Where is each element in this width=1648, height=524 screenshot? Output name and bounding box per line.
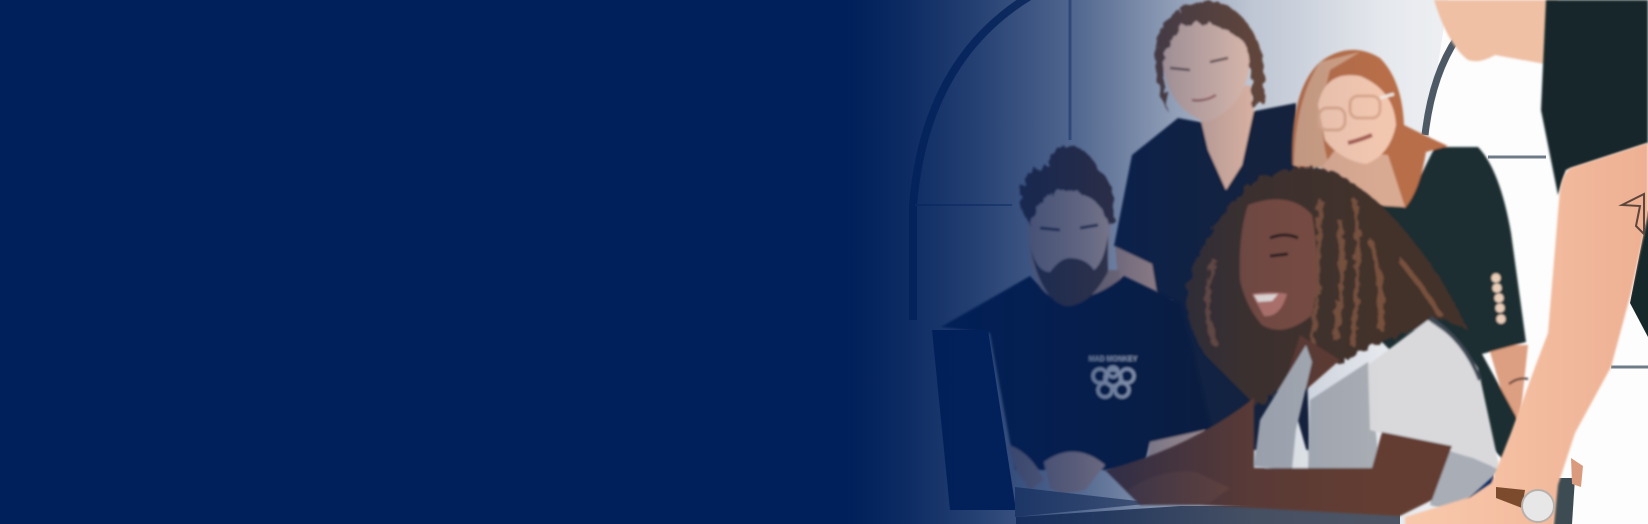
window frame at bottom <box>1553 478 1575 524</box>
small arm tattoo <box>1622 194 1644 234</box>
glasses <box>1319 94 1394 130</box>
face <box>1160 14 1250 122</box>
desk edge <box>1016 506 1400 524</box>
hair highlights <box>1208 200 1440 345</box>
face <box>1026 184 1112 302</box>
neck <box>1320 150 1405 207</box>
tattooed forearm <box>1148 430 1208 462</box>
white undershirt <box>1264 410 1312 470</box>
facial features <box>1170 58 1228 100</box>
shirt far side <box>1630 210 1648 337</box>
grey lower back <box>1430 448 1500 512</box>
navy gradient overlay <box>850 0 1648 524</box>
forearm <box>1488 345 1528 420</box>
strap <box>1430 318 1480 380</box>
man in foreground, right <box>1405 0 1648 524</box>
neck <box>1040 270 1120 300</box>
grey vest <box>1254 345 1380 470</box>
dark green blazer <box>1330 147 1526 460</box>
dark curly hair <box>1186 167 1468 408</box>
black t-shirt <box>1541 0 1648 195</box>
chin and neck <box>1434 0 1558 64</box>
bracelet <box>1509 379 1528 384</box>
blurred hand behind <box>1571 458 1583 487</box>
dark shirt <box>1114 103 1310 450</box>
face <box>1318 75 1396 164</box>
standing man, left <box>1114 2 1310 450</box>
beard <box>1030 235 1108 306</box>
auburn hair <box>1292 50 1448 208</box>
smile <box>1348 135 1372 143</box>
screen back <box>932 330 1016 510</box>
hair <box>1155 2 1265 112</box>
navy t-shirt <box>941 276 1212 470</box>
woman with glasses <box>1292 50 1528 460</box>
wristwatch <box>1496 487 1554 522</box>
laptop <box>932 330 1155 517</box>
laptop base <box>1015 487 1155 517</box>
wall arch and seams <box>913 0 1070 320</box>
pale t-shirt sleeve <box>1368 320 1500 470</box>
back wall <box>850 0 1450 524</box>
teeth <box>1254 294 1278 302</box>
open mouth <box>1252 292 1287 316</box>
neck and chest <box>1195 85 1254 190</box>
bright window <box>1425 0 1648 524</box>
neck and chest <box>1270 335 1340 470</box>
shirt rose logo <box>1089 356 1138 397</box>
typing hands <box>1008 445 1105 494</box>
arm across desk <box>1105 398 1452 516</box>
brow and eye <box>1270 235 1298 256</box>
arm <box>1115 245 1160 305</box>
eyes and brows <box>1040 225 1098 230</box>
shirt rose logo: MAD MONKEY <box>1089 356 1138 363</box>
forearm <box>1405 143 1648 524</box>
photo scene <box>850 0 1648 524</box>
curly hair <box>1020 146 1115 225</box>
face <box>1240 199 1317 330</box>
light hair streak <box>1294 52 1360 168</box>
jacket buttons <box>1491 273 1506 324</box>
front hand <box>1128 471 1230 505</box>
seated man at laptop <box>941 146 1212 494</box>
woman at front <box>1105 167 1500 516</box>
